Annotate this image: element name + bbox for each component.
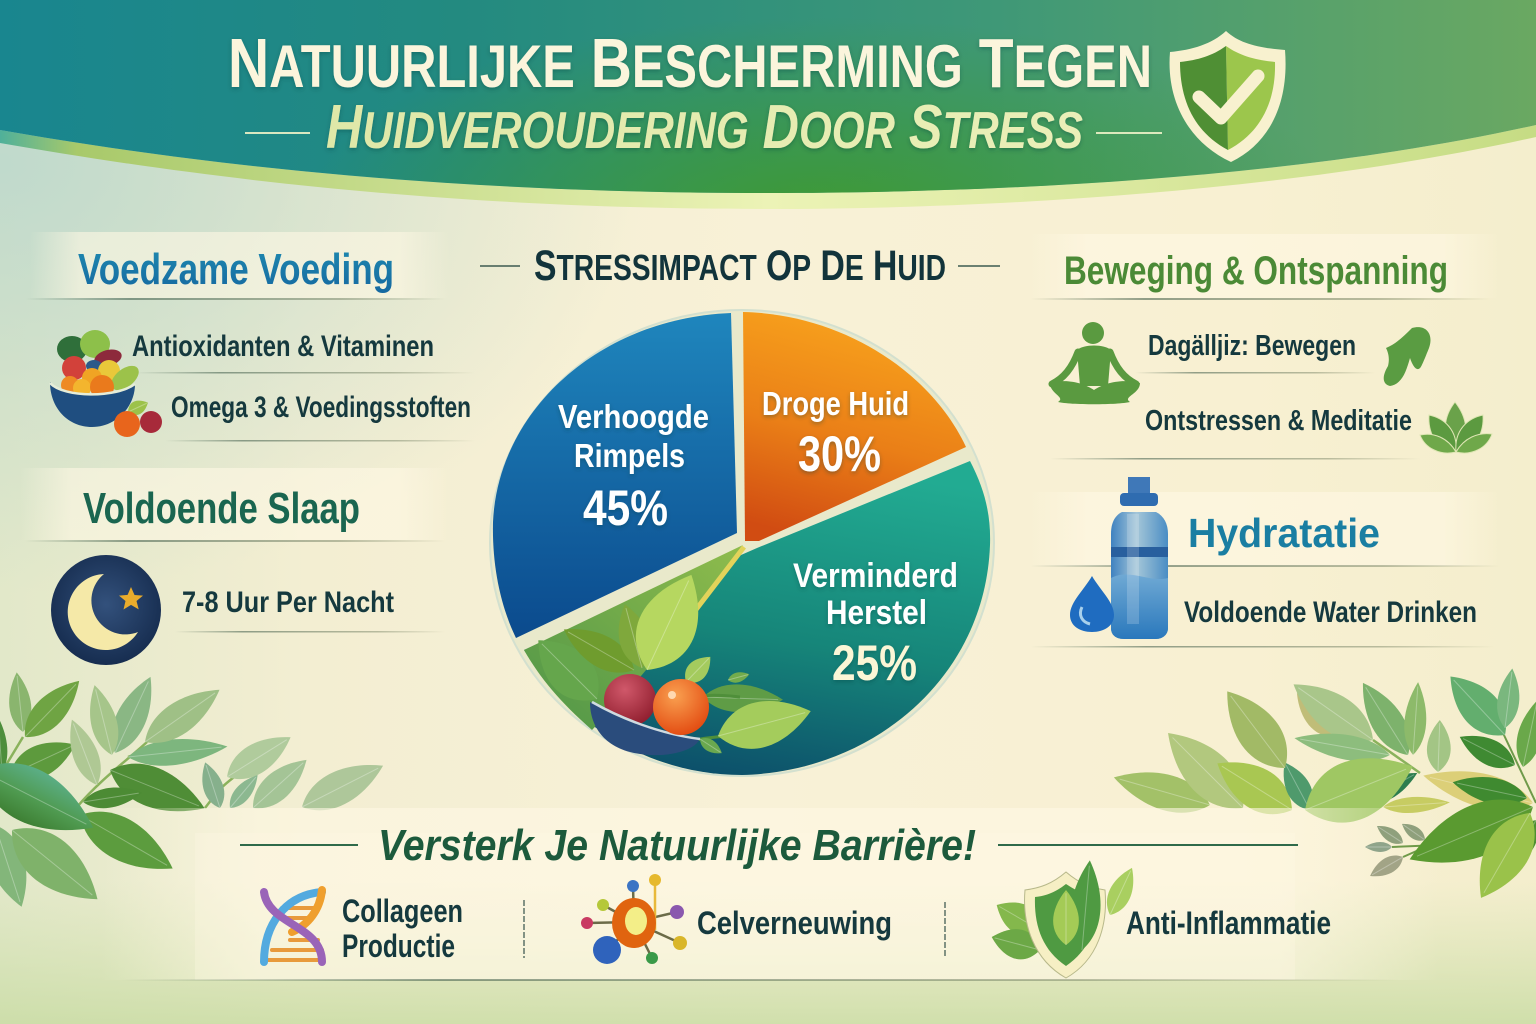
heading: barrier: Versterk Je Natuurlijke Barrière! [378,821,976,870]
subtitle: HUIDVEROUDERING DOOR STRESS [326,93,1083,162]
foliage: back leaves right [1109,669,1452,838]
label: droge huid: Droge Huid [762,385,909,422]
icon: lotus [1420,402,1492,453]
label: verhoogde rimpels: 45% [583,480,668,536]
panel: beweging en ontspanning [1030,249,1492,460]
heading: hydratatie: Hydratatie [1188,510,1380,556]
icon: atom [581,874,687,964]
pie halo [490,310,994,776]
heading: voedzame voeding: Voedzame Voeding [78,245,394,294]
icon: water drop [1070,576,1114,632]
label: verhoogde rimpels: Rimpels [574,437,685,474]
heading: stress impact: STRESSIMPACT OP DE HUID [534,242,946,290]
icon: shield with check [1170,31,1286,162]
slice: droge huid 30% [743,312,966,541]
heading: voldoende slaap: Voldoende Slaap [83,484,360,533]
label: verminderd herstel: Herstel [826,594,927,632]
icon: dna [264,890,322,962]
text: water: Voldoende Water Drinken [1184,596,1477,629]
slice: verhoogde rimpels 45% [493,313,737,638]
text: daily movement: Dagälljiz: Bewegen [1148,330,1356,362]
panel: voldoende slaap [25,484,445,665]
label: anti-inflammatie: Anti-Inflammatie [1126,905,1331,941]
label: verhoogde rimpels [558,398,709,536]
panel bands (soft highlight) [20,232,1500,566]
list item: Antioxidanten & Vitaminen [132,330,434,363]
text: destress: Ontstressen & Meditatie [1145,405,1412,437]
wedge: foliage and fruit [523,545,817,758]
foliage: back leaves left [0,671,391,827]
foliage: front leaves right [1365,664,1536,909]
label: droge huid [762,385,909,482]
icon: moon [51,555,161,665]
label: verminderd herstel: Verminderd [793,557,958,595]
icon: water bottle [1111,477,1168,639]
label: collageen: Productie [342,928,455,964]
label: celverneuwing: Celverneuwing [697,905,892,941]
label: verminderd herstel [793,557,958,691]
label: verhoogde rimpels: Verhoogde [558,398,709,435]
text: 7-8 Uur Per Nacht [182,586,394,619]
header banner [0,0,1536,209]
icon: shield with leaves [988,859,1142,978]
label: droge huid: 30% [798,426,881,482]
label: collageen [342,893,463,964]
label: collageen: Collageen [342,893,463,929]
icon: fruit bowl [50,330,162,437]
panel: voedzame voeding [25,245,475,442]
band background [100,808,1440,980]
pie chart [490,310,994,776]
title: NATUURLIJKE BESCHERMING TEGEN [228,24,1152,102]
label: verminderd herstel: 25% [832,635,917,691]
panel: natural barrier [100,808,1440,981]
icon: shoe [1384,327,1430,386]
icon: meditating figure [1050,322,1140,404]
list item: Omega 3 & Voedingsstoften [171,391,471,424]
panel: hydratatie [1030,477,1500,648]
slice: verminderd herstel 25% [524,461,990,775]
foliage: front leaves left [0,746,183,918]
